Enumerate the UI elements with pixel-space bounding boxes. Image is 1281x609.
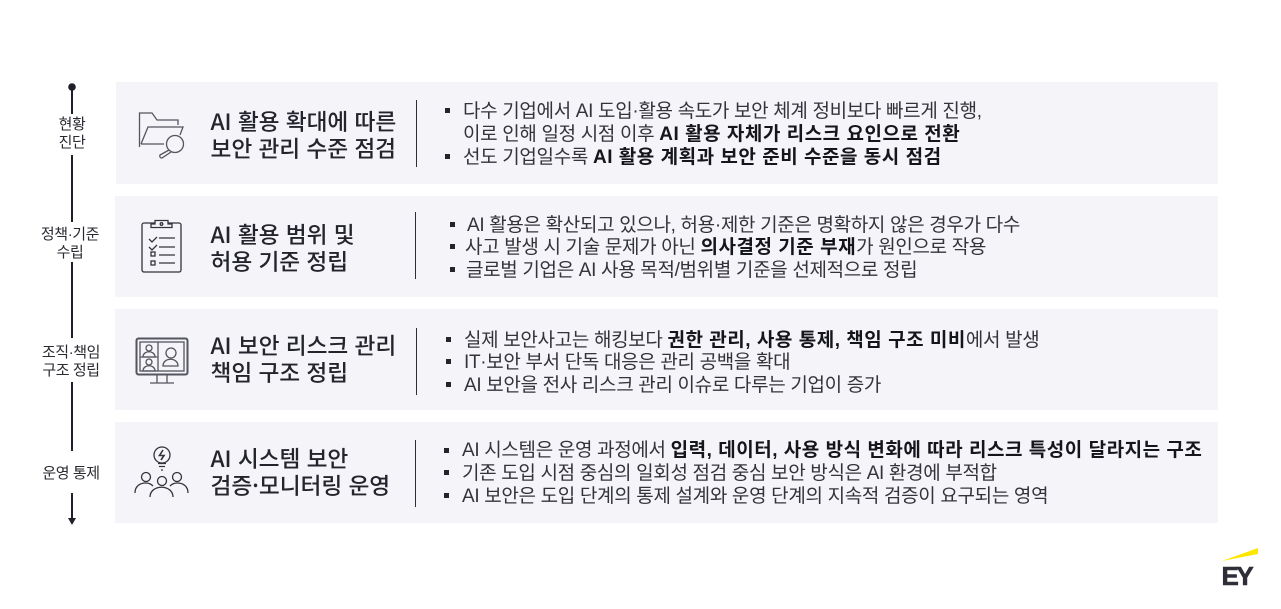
stage label: 조직·책임 구조 정립: 구조 정립: [42, 362, 100, 379]
bullets: 정책 기준 수립: [450, 215, 1020, 281]
bullets: 운영 통제: AI 보안은 도입 단계의 통제 설계와 운영 단계의 지속적 검증이 요구되는 영역: [462, 486, 1048, 507]
bullets: 현황 진단: 이로 인해 일정 시점 이후 AI 활용 자체가 리스크 요인으로 전환: [463, 124, 960, 145]
stage label: 현황 진단: 현황: [59, 116, 85, 133]
bullets: 운영 통제: 기존 도입 시점 중심의 일회성 점검 중심 보안 방식은 AI 환경에 부적합: [462, 463, 997, 484]
logo: EY: [1222, 548, 1258, 591]
panel: 조직 책임 구조: [115, 309, 1218, 410]
bullets: 운영 통제: AI 시스템은 운영 과정에서 입력, 데이터, 사용 방식 변화에 따라 리스크 특성이 달라지는 구조: [462, 440, 1202, 461]
stage label: 현황 진단: 진단: [59, 134, 85, 151]
bullets: 조직 책임 구조: [446, 330, 1039, 396]
bullets: 조직 책임 구조: IT·보안 부서 단독 대응은 관리 공백을 확대: [464, 352, 790, 373]
stage label: 운영 통제: [31, 451, 111, 493]
bullets: 현황 진단: [445, 101, 982, 168]
panel: 정책 기준 수립: [115, 196, 1218, 297]
heading: AI 활용 확대에 따른 보안 관리 수준 점검: 보안 관리 수준 점검: [210, 131, 396, 164]
bullets: 정책 기준 수립: 글로벌 기업은 AI 사용 목적/범위별 기준을 선제적으로 정립: [466, 260, 917, 281]
bullets: 정책 기준 수립: 사고 발생 시 기술 문제가 아닌 의사결정 기준 부재가 원인으로 작용: [465, 237, 986, 258]
heading: AI 시스템 보안 검증·모니터링 운영: 검증·모니터링 운영: [210, 468, 390, 501]
bullets: 운영 통제: [444, 440, 1202, 507]
icon: video meeting monitor: [136, 338, 188, 384]
stage label: 운영 통제: 운영 통제: [42, 465, 100, 482]
bullets: 현황 진단: 다수 기업에서 AI 도입·활용 속도가 보안 체계 정비보다 빠르게 진행,: [463, 101, 982, 122]
heading: AI 활용 범위 및 허용 기준 정립: [210, 216, 355, 276]
heading: AI 활용 범위 및 허용 기준 정립: AI 활용 범위 및: [210, 216, 355, 250]
heading: AI 활용 확대에 따른 보안 관리 수준 점검: [210, 104, 396, 164]
logo: EY: EY: [1222, 561, 1251, 591]
panel: 현황 진단: [116, 82, 1218, 184]
divider: [416, 100, 417, 167]
icon: clipboard checklist: [141, 220, 182, 273]
divider: [415, 440, 416, 507]
stage label: 정책·기준 수립: 정책·기준: [41, 226, 99, 243]
heading: AI 보안 리스크 관리 책임 구조 정립: 책임 구조 정립: [210, 354, 348, 388]
divider: [416, 328, 417, 395]
heading: AI 보안 리스크 관리 책임 구조 정립: [210, 328, 396, 388]
stage label: 조직·책임 구조 정립: 조직·책임: [42, 344, 100, 361]
bullets: 정책 기준 수립: AI 활용은 확산되고 있으나, 허용·제한 기준은 명확하지 않은 경우가 다수: [467, 215, 1020, 236]
stage label: 정책·기준 수립: 수립: [57, 244, 83, 261]
stage label: 조직·책임 구조 정립: [31, 338, 111, 382]
bullets: 조직 책임 구조: AI 보안을 전사 리스크 관리 이슈로 다루는 기업이 증가: [464, 375, 881, 396]
timeline arrow: [68, 83, 76, 525]
bullets: 조직 책임 구조: 실제 보안사고는 해킹보다 권한 관리, 사용 통제, 책임 구조 미비에서 발생: [464, 330, 1039, 351]
stage label: 현황 진단: [32, 114, 112, 155]
icon: folder with magnifier: [138, 112, 184, 159]
bullets: 현황 진단: 선도 기업일수록 AI 활용 계획과 보안 준비 수준을 동시 점검: [463, 147, 942, 168]
heading: AI 보안 리스크 관리 책임 구조 정립: AI 보안 리스크 관리: [210, 328, 396, 360]
heading: AI 시스템 보안 검증·모니터링 운영: [210, 441, 390, 501]
heading: AI 활용 범위 및 허용 기준 정립: 허용 기준 정립: [210, 244, 348, 276]
stage label: 정책·기준 수립: [30, 222, 110, 262]
divider: [415, 212, 416, 279]
panel: 운영 통제: [115, 422, 1218, 523]
heading: AI 시스템 보안 검증·모니터링 운영: AI 시스템 보안: [210, 441, 348, 474]
icon: people with light bulb: [134, 446, 189, 497]
heading: AI 활용 확대에 따른 보안 관리 수준 점검: AI 활용 확대에 따른: [210, 104, 396, 137]
